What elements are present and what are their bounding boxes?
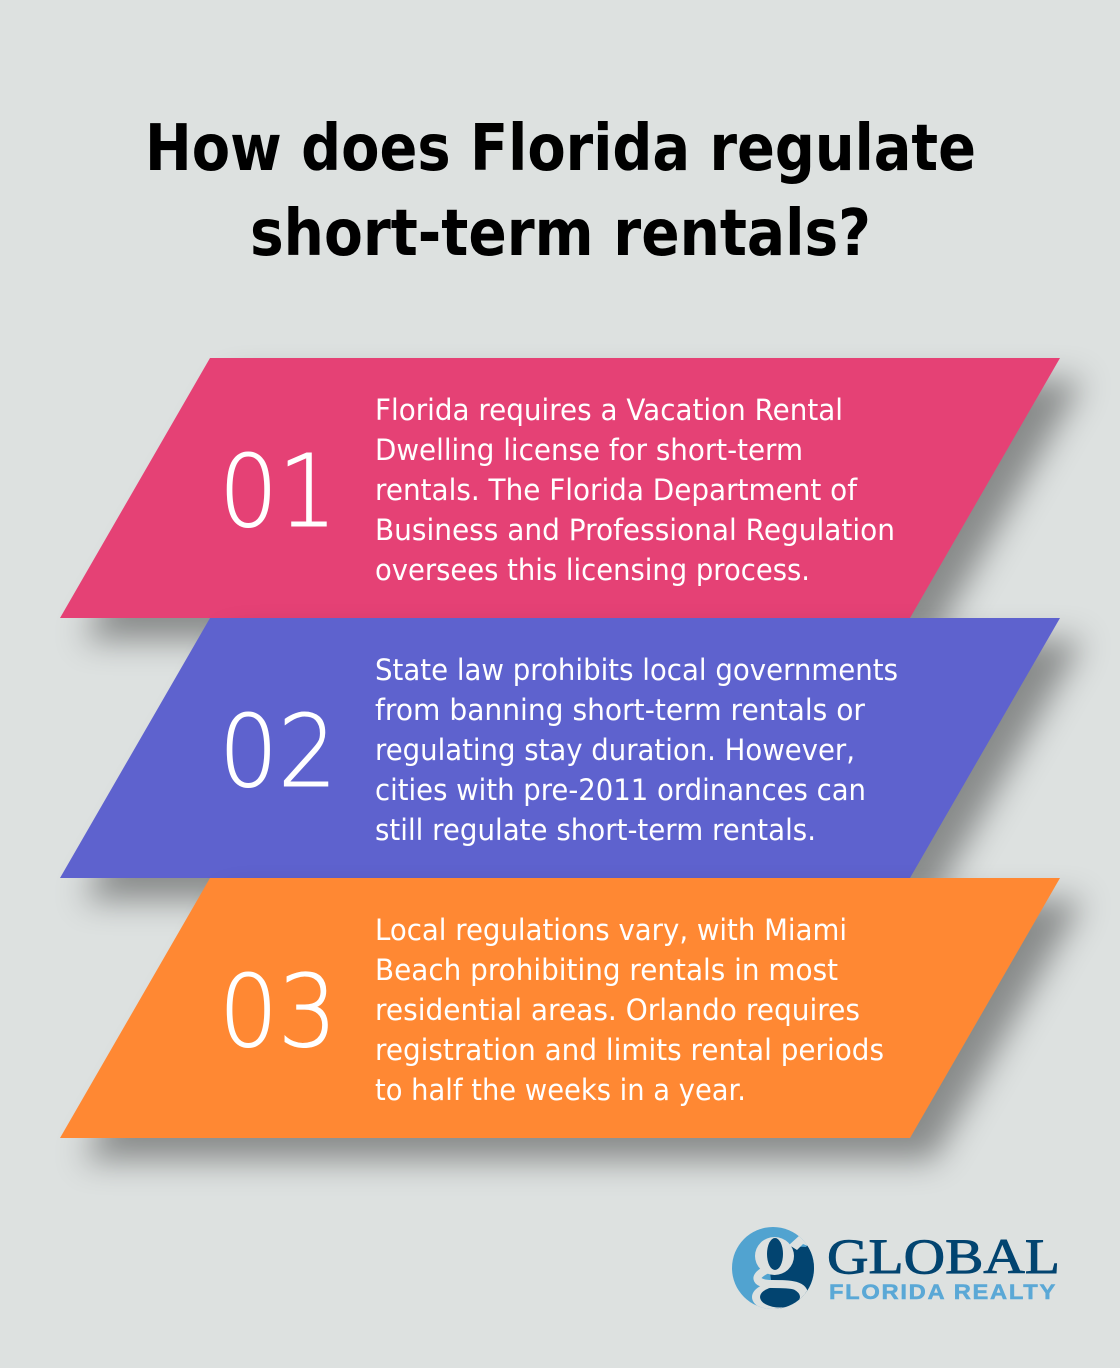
number 02: 02 <box>219 693 337 810</box>
logo: Global Florida Realty <box>731 1226 1060 1312</box>
title: short-term rentals? <box>250 197 871 271</box>
text block: step 02 <box>375 653 898 847</box>
band: pink <box>60 358 1060 618</box>
band: orange <box>60 878 1060 1138</box>
text block: step 03: registration and limits rental periods <box>375 1033 884 1067</box>
text block: step 01: rentals. The Florida Department of <box>375 473 858 507</box>
text block: step 01 <box>375 393 895 587</box>
icon: g monogram <box>732 1227 814 1309</box>
text block: step 02: regulating stay duration. However, <box>375 733 855 767</box>
band: blue <box>60 618 1060 878</box>
text block: step 01: oversees this licensing process. <box>375 553 810 587</box>
text block: step 03 <box>375 913 884 1107</box>
panel: step 02 <box>60 618 1060 878</box>
text block: step 03: Local regulations vary, with Miami <box>375 913 847 947</box>
text block: step 02: still regulate short-term rentals. <box>375 813 816 847</box>
text block: step 01: Dwelling license for short-term <box>375 433 803 467</box>
text block: step 02: State law prohibits local governments <box>375 653 898 687</box>
text block: step 02: from banning short-term rentals or <box>375 693 865 727</box>
panel: step 03 <box>60 878 1060 1138</box>
title <box>145 112 976 271</box>
wordmark: GLOBAL: GLOBAL <box>827 1228 1060 1284</box>
text block: step 01: Florida requires a Vacation Rental <box>375 393 843 427</box>
number 03: 03 <box>219 953 337 1070</box>
text block: step 03: Beach prohibiting rentals in most <box>375 953 838 987</box>
text block: step 02: cities with pre-2011 ordinances can <box>375 773 866 807</box>
number 01: 01 <box>219 433 337 550</box>
title: How does Florida regulate <box>145 112 976 186</box>
text block: step 03: residential areas. Orlando requires <box>375 993 860 1027</box>
wordmark: FLORIDA REALTY: FLORIDA REALTY <box>829 1281 1057 1304</box>
panel: step 01 <box>60 358 1060 618</box>
text block: step 01: Business and Professional Regulation <box>375 513 895 547</box>
text block: step 03: to half the weeks in a year. <box>375 1073 746 1107</box>
